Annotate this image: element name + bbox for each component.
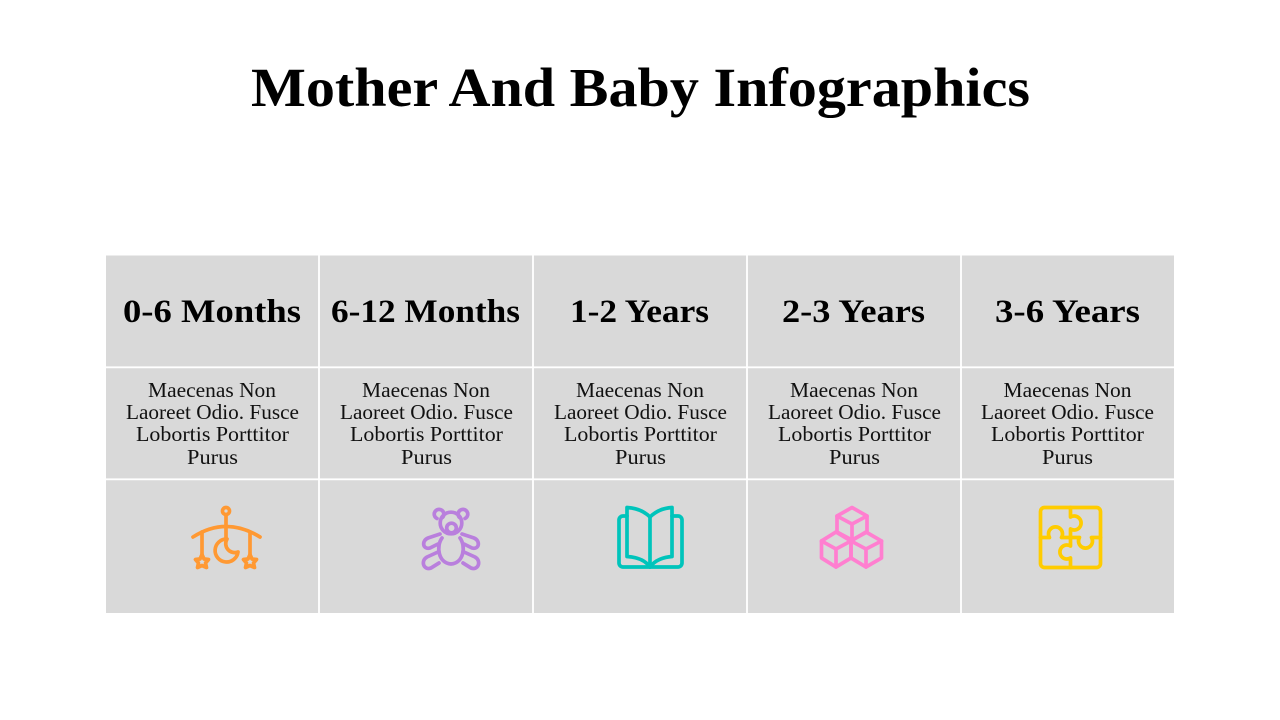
icon: puzzle bbox=[1040, 508, 1100, 568]
text block: column 1: Lobortis Porttitor bbox=[136, 422, 289, 446]
text block: column 3 bbox=[554, 378, 727, 469]
text block: column 2 bbox=[340, 378, 513, 469]
text block: column 2: Laoreet Odio. Fusce bbox=[340, 400, 513, 424]
text block: column 2: Lobortis Porttitor bbox=[350, 422, 503, 446]
text block: column 3: Lobortis Porttitor bbox=[564, 422, 717, 446]
text block: column 5 bbox=[981, 378, 1154, 469]
title: Mother And Baby Infographics bbox=[251, 57, 1030, 118]
text block: column 2: Maecenas Non bbox=[362, 378, 490, 402]
column: 6-12 months bbox=[331, 294, 520, 569]
column: 1-2 years bbox=[554, 294, 727, 567]
text block: column 2: Purus bbox=[401, 445, 452, 469]
icon: baby mobile bbox=[193, 508, 260, 568]
text block: column 4: Laoreet Odio. Fusce bbox=[768, 400, 941, 424]
column: 0-6 months bbox=[123, 294, 301, 568]
text block: column 4: Purus bbox=[829, 445, 880, 469]
icon: open book bbox=[619, 508, 682, 567]
text block: column 1: Maecenas Non bbox=[148, 378, 276, 402]
text block: column 5: Maecenas Non bbox=[1004, 378, 1132, 402]
text block: column 4: Lobortis Porttitor bbox=[778, 422, 931, 446]
text block: column 3: Maecenas Non bbox=[576, 378, 704, 402]
heading: 0-6 months: 0-6 Months bbox=[123, 294, 301, 330]
column: 3-6 years bbox=[981, 294, 1154, 568]
text block: column 3: Laoreet Odio. Fusce bbox=[554, 400, 727, 424]
heading: 1-2 years: 1-2 Years bbox=[570, 294, 709, 330]
text block: column 1 bbox=[126, 378, 299, 469]
table grid bbox=[106, 255, 1174, 613]
text block: column 1: Purus bbox=[187, 445, 238, 469]
text block: column 5: Laoreet Odio. Fusce bbox=[981, 400, 1154, 424]
heading: 6-12 months: 6-12 Months bbox=[331, 294, 520, 330]
icon: toy blocks bbox=[822, 508, 882, 567]
column: 2-3 years bbox=[768, 294, 941, 567]
text block: column 1: Laoreet Odio. Fusce bbox=[126, 400, 299, 424]
text block: column 5: Lobortis Porttitor bbox=[991, 422, 1144, 446]
icon: teddy bear bbox=[423, 509, 479, 569]
heading: 3-6 years: 3-6 Years bbox=[995, 294, 1140, 330]
text block: column 4: Maecenas Non bbox=[790, 378, 918, 402]
text block: column 3: Purus bbox=[615, 445, 666, 469]
text block: column 4 bbox=[768, 378, 941, 469]
text block: column 5: Purus bbox=[1042, 445, 1093, 469]
heading: 2-3 years: 2-3 Years bbox=[782, 294, 925, 330]
